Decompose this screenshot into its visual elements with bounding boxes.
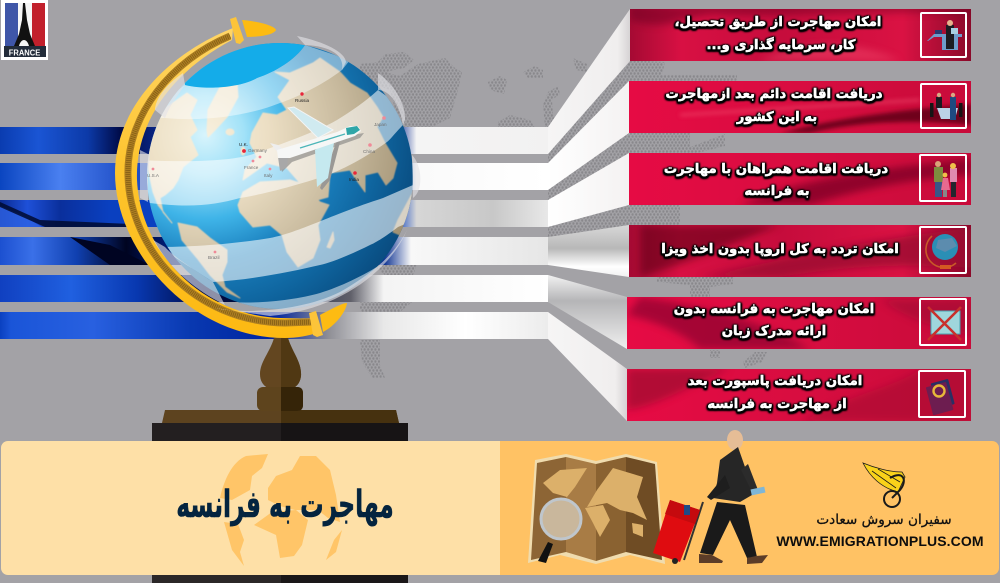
text xyxy=(675,15,881,53)
icon: family xyxy=(920,155,966,201)
globe xyxy=(140,30,420,325)
banner 6 xyxy=(627,369,971,421)
icon: France flag badge: FRANCE xyxy=(9,48,41,58)
text xyxy=(666,87,883,125)
illustration: red suitcase xyxy=(653,500,703,564)
icon: world map watermark xyxy=(220,454,342,566)
text: امکان تردد به کل اروپا بدون اخذ ویزا xyxy=(661,242,899,257)
icon: small globe xyxy=(920,227,966,273)
continents xyxy=(147,58,420,298)
dotted world map backdrop xyxy=(360,52,767,378)
illustration: walking man xyxy=(699,430,768,564)
magnifier xyxy=(541,499,581,539)
text: دریافت اقامت همراهان با مهاجرت xyxy=(664,162,888,177)
ghost ribbon ends xyxy=(140,36,420,316)
text: امکان مهاجرت به فرانسه بدون xyxy=(674,302,874,317)
icon: man at desk xyxy=(921,13,966,57)
stand xyxy=(152,338,408,583)
translucent ribbons xyxy=(147,45,412,309)
city markers: Italy xyxy=(264,173,273,178)
city markers: U.S.A xyxy=(147,173,160,178)
text xyxy=(688,374,862,412)
logo: WWW.EMIGRATIONPLUS.COM xyxy=(776,533,984,549)
illustration: folded map xyxy=(528,454,665,564)
icon: France flag badge xyxy=(1,0,48,60)
text: به این کشور xyxy=(736,110,817,125)
ribbon fans to banners xyxy=(548,9,630,421)
globe arm xyxy=(115,17,347,338)
text: امکان مهاجرت از طریق تحصیل، xyxy=(675,15,881,30)
banner 2 xyxy=(629,81,971,133)
city markers xyxy=(147,92,387,260)
ribbon: six flag stripes blue to white xyxy=(0,127,548,339)
text: از مهاجرت به فرانسه xyxy=(707,397,847,412)
text: دریافت اقامت دائم بعد ازمهاجرت xyxy=(666,87,883,102)
city markers: Japan xyxy=(374,122,387,127)
city markers: Brazil xyxy=(208,255,220,260)
text xyxy=(664,162,888,199)
icon: crossed document xyxy=(920,299,966,345)
banner 1 xyxy=(630,5,971,61)
icon: passports xyxy=(919,371,965,417)
city markers: France xyxy=(244,165,259,170)
panel: title bar xyxy=(1,441,500,575)
city markers: Russia xyxy=(295,98,309,103)
text: ارائه مدرک زبان xyxy=(722,324,826,339)
banner 3 xyxy=(629,153,971,205)
panel: brand bar xyxy=(500,430,999,575)
city markers: India xyxy=(349,177,359,182)
text: کار، سرمایه گذاری و... xyxy=(707,37,856,53)
text xyxy=(674,302,874,339)
text: امکان دریافت پاسپورت بعد xyxy=(688,374,862,389)
title: مهاجرت به فرانسه xyxy=(176,483,394,527)
banner 4 xyxy=(629,225,971,277)
city markers: China xyxy=(363,149,375,154)
text: به فرانسه xyxy=(744,184,810,199)
logo: سفیران سروش سعادت xyxy=(816,512,952,528)
city markers: Germany xyxy=(248,148,268,153)
banner 5 xyxy=(627,297,971,349)
icon: handshake meeting xyxy=(921,84,966,128)
city markers: U.K. xyxy=(239,142,248,147)
top cap xyxy=(184,43,305,88)
icon: airplane xyxy=(270,107,364,190)
logo xyxy=(776,463,984,549)
